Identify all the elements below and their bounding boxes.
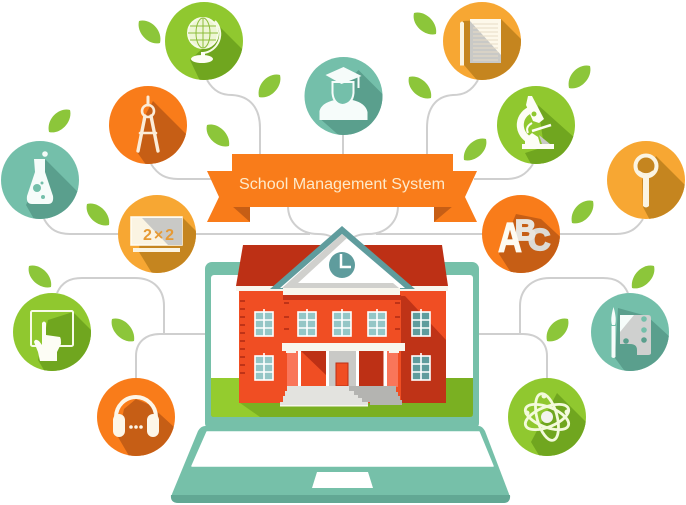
icon: pencil and paper	[443, 2, 521, 80]
icon: paint palette and brush	[591, 293, 669, 371]
icon: flask	[1, 141, 79, 219]
icon: microscope	[497, 86, 575, 164]
portico	[282, 343, 405, 387]
ABC text: A	[498, 214, 522, 261]
banner main	[232, 154, 453, 207]
icon: headphones	[97, 378, 175, 456]
laptop	[171, 262, 510, 503]
laptop trackpad	[312, 472, 373, 488]
laptop keyboard	[192, 432, 493, 466]
windows	[255, 312, 430, 380]
school building	[236, 226, 448, 406]
ABC text: C	[528, 222, 550, 257]
icon: tablet touch	[13, 293, 91, 371]
decorative leaves	[29, 13, 654, 341]
icon: magnifier	[607, 141, 685, 219]
ABC text: B	[515, 215, 536, 247]
ABC text	[498, 214, 550, 261]
eaves	[236, 286, 448, 291]
banner title: School Management System	[239, 176, 445, 193]
icon: globe	[165, 2, 243, 80]
icon: atom	[508, 378, 586, 456]
icon: chalkboard 2x2	[118, 195, 196, 273]
entrance steps	[280, 386, 402, 406]
icon: drawing compass	[109, 86, 187, 164]
laptop screen	[205, 262, 479, 430]
chalkboard sum text: 2×2	[143, 227, 174, 244]
brick wall	[239, 290, 446, 403]
pediment	[270, 226, 415, 289]
roof	[236, 245, 448, 286]
banner	[207, 154, 477, 222]
banner left tail	[207, 171, 250, 222]
connector lines	[44, 80, 643, 378]
screen grass	[211, 378, 473, 417]
laptop base	[171, 426, 509, 503]
banner right tail	[434, 171, 477, 222]
icon: graduate	[304, 57, 382, 135]
clock	[329, 252, 355, 278]
icon: ABC letters	[482, 195, 560, 273]
